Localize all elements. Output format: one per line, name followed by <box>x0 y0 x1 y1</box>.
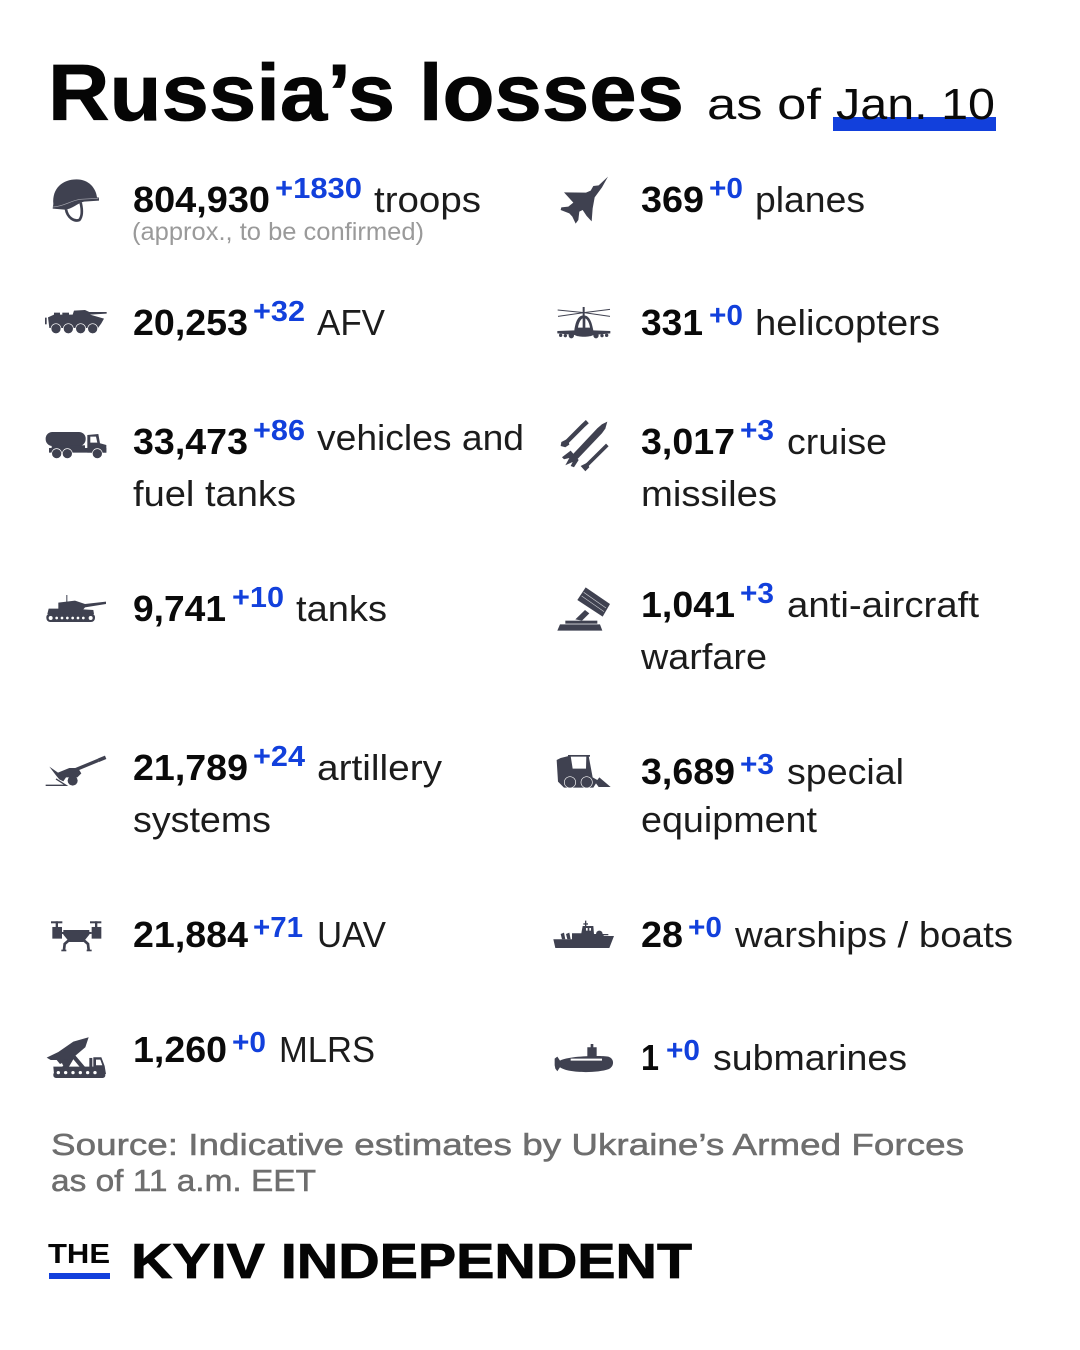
stat: AFV <box>133 296 385 343</box>
icon: helmet <box>53 179 99 220</box>
title <box>48 48 996 137</box>
icon: helicopter <box>557 307 610 338</box>
logo: The Kyiv Independent: KYIV INDEPENDENT <box>131 1235 692 1289</box>
stat: tanks <box>133 582 387 629</box>
stat: special equipment <box>641 749 904 840</box>
stat: warships and boats <box>641 912 1013 955</box>
stat: MLRS: +0 <box>232 1027 266 1059</box>
source note <box>51 1127 964 1198</box>
source note: Source: Indicative estimates by Ukraine’s Armed Forces <box>51 1127 964 1162</box>
icon: warship <box>553 921 614 948</box>
stat: artillery systems: artillery <box>317 747 442 788</box>
logo: The Kyiv Independent: THE <box>48 1238 110 1269</box>
stat: troops: (approx., to be confirmed) <box>132 218 424 246</box>
stat: artillery systems: +24 <box>253 741 305 773</box>
stat: helicopters <box>641 300 940 343</box>
stat: special equipment: 3,689 <box>641 751 735 792</box>
stat: cruise missiles: +3 <box>740 415 774 447</box>
icon: fuel truck <box>46 432 106 459</box>
stat: special equipment: special <box>787 751 904 792</box>
stat: troops: 804,930 <box>133 179 270 220</box>
stat: special equipment: equipment <box>641 799 817 840</box>
stat: AFV: AFV <box>317 302 385 343</box>
icon: cruise missiles <box>561 422 607 471</box>
stat: warships and boats: +0 <box>688 912 722 944</box>
icon: armoured vehicle <box>45 310 107 334</box>
stat: helicopters: helicopters <box>755 302 940 343</box>
stat: anti-aircraft warfare: warfare <box>640 636 767 677</box>
title: as of <box>707 80 822 129</box>
icon: anti-aircraft launcher <box>557 587 610 631</box>
stat: cruise missiles: cruise <box>787 421 887 462</box>
icon: special equipment <box>557 755 611 788</box>
stat: artillery systems: systems <box>133 799 271 840</box>
stat: tanks: 9,741 <box>133 588 226 629</box>
icon: plane <box>561 177 608 224</box>
stat: MLRS: 1,260 <box>133 1029 227 1070</box>
stat: vehicles and fuel tanks: fuel tanks <box>133 473 296 514</box>
stat: warships and boats: warships / boats <box>734 914 1013 955</box>
stat: MLRS <box>133 1027 375 1070</box>
stat: warships and boats: 28 <box>641 914 683 955</box>
stat: MLRS: MLRS <box>279 1029 375 1070</box>
stat: cruise missiles: missiles <box>641 473 777 514</box>
stat: helicopters: +0 <box>709 300 743 332</box>
stat: planes: 369 <box>641 179 704 220</box>
stat: artillery systems: 21,789 <box>133 747 248 788</box>
stat: planes: +0 <box>709 173 743 205</box>
stat: UAV: 21,884 <box>133 914 248 955</box>
stat: anti-aircraft warfare: +3 <box>740 578 774 610</box>
icon: rocket launcher <box>47 1037 106 1078</box>
stat: cruise missiles: 3,017 <box>641 421 735 462</box>
stat: troops: troops <box>374 179 481 220</box>
stat: UAV: +71 <box>253 912 303 944</box>
stat: submarines: submarines <box>713 1037 907 1078</box>
stat: vehicles and fuel tanks: 33,473 <box>133 421 248 462</box>
stat: troops: +1830 <box>275 173 362 205</box>
stat: anti-aircraft warfare: anti-aircraft <box>787 584 979 625</box>
title: Jan. 10 <box>836 80 995 129</box>
stat: planes <box>641 173 865 220</box>
icon: tank <box>46 595 106 622</box>
stat: AFV: 20,253 <box>133 302 248 343</box>
stat: submarines <box>641 1035 907 1078</box>
stat: helicopters: 331 <box>641 302 703 343</box>
stat: vehicles and fuel tanks: +86 <box>253 415 305 447</box>
source note: as of 11 a.m. EET <box>51 1163 316 1198</box>
stat: vehicles and fuel tanks <box>133 415 524 514</box>
stat: UAV: UAV <box>317 914 386 955</box>
stat: anti-aircraft warfare: 1,041 <box>641 584 735 625</box>
stat: cruise missiles <box>641 415 887 514</box>
stat: planes: planes <box>755 179 865 220</box>
stat: artillery systems <box>133 741 442 840</box>
stat: special equipment: +3 <box>740 749 774 781</box>
stat: anti-aircraft warfare <box>640 578 979 677</box>
stat: tanks: +10 <box>232 582 284 614</box>
icon: drone <box>51 921 101 951</box>
stat: submarines: +0 <box>666 1035 700 1067</box>
stat: submarines: 1 <box>641 1037 659 1078</box>
stat: tanks: tanks <box>296 588 387 629</box>
stat: UAV <box>133 912 386 955</box>
icon: artillery <box>46 757 106 786</box>
stat: AFV: +32 <box>253 296 305 328</box>
icon: submarine <box>555 1044 613 1072</box>
title: Russia’s losses <box>48 48 684 137</box>
stat: vehicles and fuel tanks: vehicles and <box>317 417 524 458</box>
stat: troops <box>132 173 481 246</box>
